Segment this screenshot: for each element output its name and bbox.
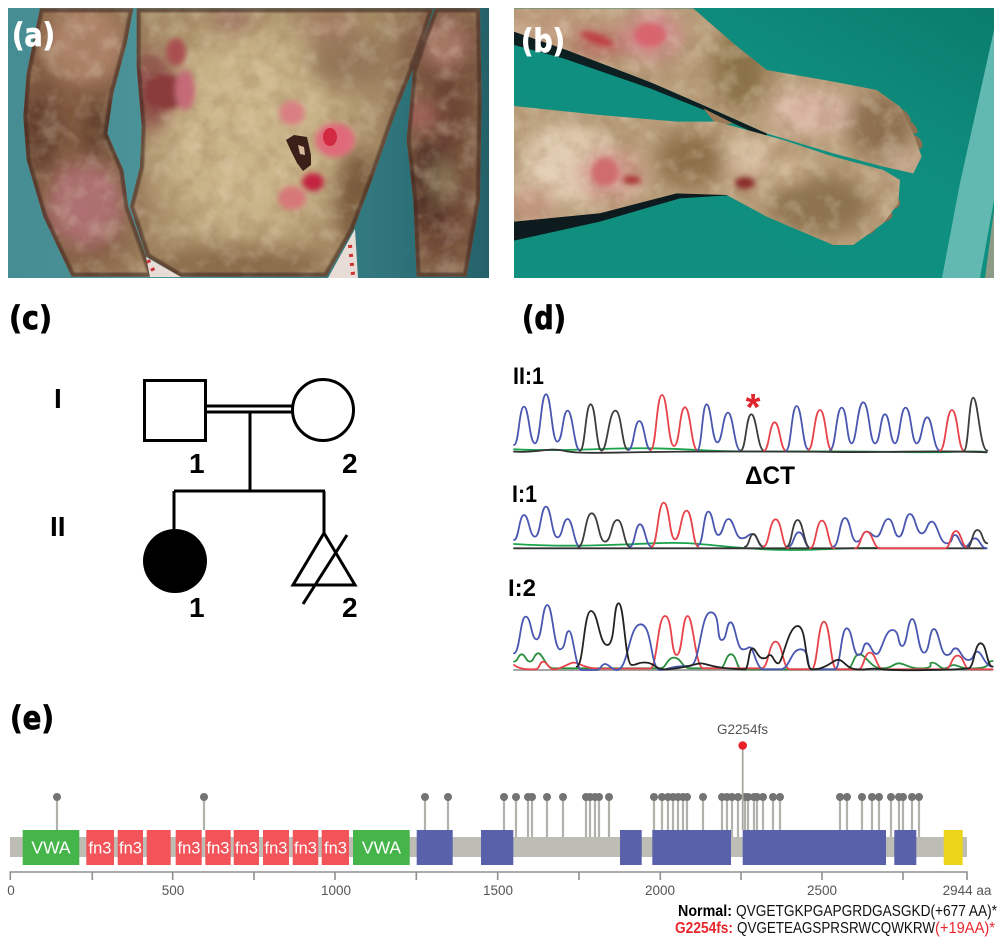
- trace label II:1: II:1: [513, 363, 544, 390]
- fn3 domains: fn3: [89, 840, 111, 858]
- sequence trace I:2: [508, 575, 993, 670]
- panel label (a): (a): [12, 16, 55, 54]
- descent lines: [174, 412, 325, 533]
- panel label (e): (e): [10, 699, 54, 737]
- fn3 domains: fn3: [119, 840, 142, 858]
- G2254fs mutation lollipop: [717, 722, 768, 830]
- normal protein sequence line: Normal:: [678, 903, 732, 920]
- fn3 domains: [86, 830, 349, 865]
- fn3 domains: fn3: [235, 840, 258, 858]
- VWA domain 1: VWA: [31, 838, 71, 858]
- sequence trace II:1: [513, 363, 987, 453]
- amino acid position axis: [7, 872, 992, 898]
- VWA domain 2: [353, 830, 410, 865]
- fn3 domains: fn3: [178, 840, 200, 858]
- pedigree chart: [50, 380, 358, 623]
- affected daughter filled circle: [143, 529, 207, 593]
- deceased triangle with slash: [293, 533, 355, 604]
- amino acid position axis: 500: [162, 883, 184, 898]
- panel label (d): (d): [522, 299, 566, 337]
- amino acid position axis: 0: [7, 883, 15, 898]
- father square: [144, 380, 206, 440]
- generation label I: I: [54, 383, 62, 414]
- individual numbers: 2: [342, 448, 358, 479]
- VWA domain 2: VWA: [362, 838, 401, 858]
- generation label II: II: [50, 511, 66, 542]
- individual numbers: [189, 448, 358, 623]
- fn3 domains: fn3: [294, 840, 317, 858]
- panel label (b): (b): [521, 22, 565, 60]
- trace label I:2: I:2: [508, 575, 536, 602]
- amino acid position axis: 2944 aa: [943, 883, 992, 898]
- amino acid position axis: 1500: [483, 883, 513, 898]
- collagen domains in blue: [417, 830, 916, 865]
- sequence trace I:1: [512, 481, 987, 550]
- individual numbers: 1: [189, 448, 205, 479]
- G2254fs mutation lollipop: G2254fs: [717, 722, 768, 737]
- individual numbers: 2: [342, 592, 358, 623]
- consanguineous double line: [206, 406, 293, 412]
- photo (b): legs and feet on green sheet: [500, 8, 994, 278]
- amino acid position axis: 2500: [807, 883, 837, 898]
- mutant G2254fs protein sequence line: G2254fs:: [675, 920, 733, 937]
- trace label I:1: I:1: [512, 481, 537, 508]
- fn3 domains: fn3: [265, 840, 287, 858]
- fn3 domains: fn3: [324, 840, 347, 858]
- VWA domain 1: [23, 830, 79, 865]
- individual numbers: 1: [189, 592, 205, 623]
- mother circle: [292, 380, 354, 440]
- fn3 domains: fn3: [207, 840, 229, 858]
- protein domain lollipop plot: [7, 722, 992, 898]
- amino acid position axis: 2000: [645, 883, 675, 898]
- deletion label delta CT: ΔCT: [745, 462, 795, 490]
- yellow C-terminal domain: [944, 830, 963, 865]
- panel label (c): (c): [9, 299, 52, 337]
- red asterisk marking deletion: *: [746, 387, 761, 429]
- mutant G2254fs protein sequence line: (+19AA)*: [935, 920, 995, 937]
- protein backbone bar: [10, 837, 967, 857]
- mutation lollipop stems and heads: [53, 793, 923, 837]
- amino acid position axis: 1000: [321, 883, 351, 898]
- mutant G2254fs protein sequence line: QVGETEAGSPRSRWCQWKRW: [737, 920, 935, 937]
- photo (a): torso and arms with skin lesions: [8, 5, 489, 283]
